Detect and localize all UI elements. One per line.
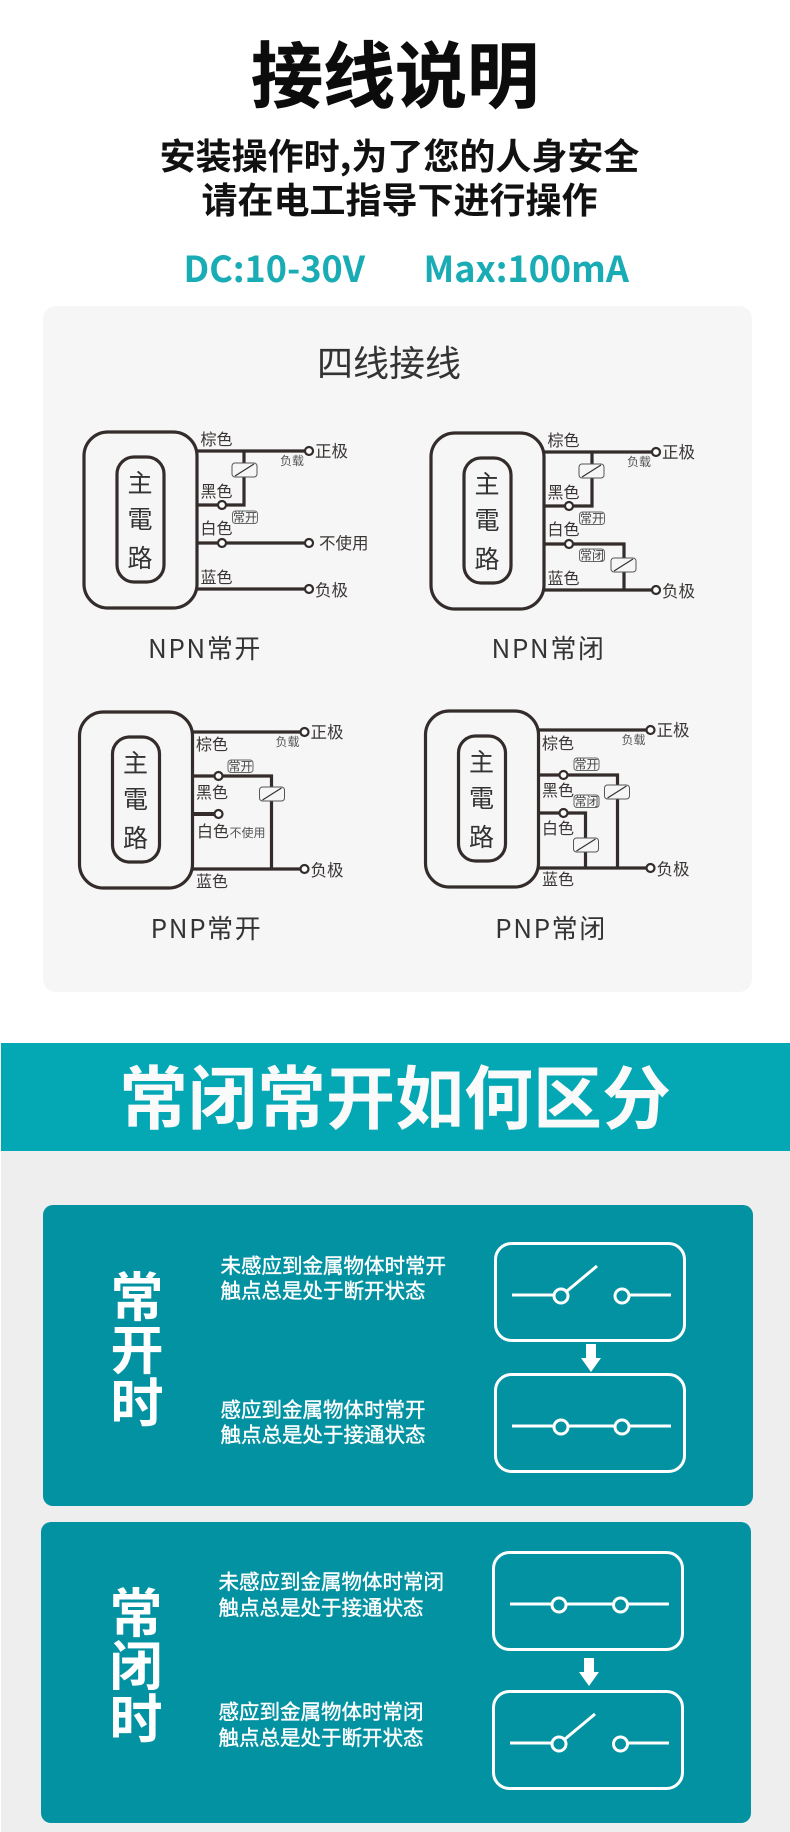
diagram: NPN normally closed: 白色 (548, 516, 580, 540)
vertical heading: 常 (110, 1572, 162, 1648)
diagram: NPN normally closed: 正极 (662, 439, 695, 463)
vertical heading: 时 (110, 1678, 162, 1754)
diagram: PNP normally open (80, 712, 344, 946)
safety notice: 请在电工指导下进行操作 (201, 172, 598, 224)
panel heading: 四线接线 (317, 335, 461, 387)
diagram: NPN normally closed: 主 (474, 465, 500, 501)
banner: how to distinguish NC and NO (1, 1043, 790, 1151)
arrow: down (581, 1344, 601, 1372)
description: sensing metal: 感应到金属物体时常开 (220, 1393, 426, 1423)
description: not sensing metal: 触点总是处于接通状态 (218, 1591, 424, 1621)
vertical heading (110, 1256, 164, 1438)
diagram: PNP normally open: 常开 (228, 758, 253, 775)
diagram: NPN normally closed: 常开 (580, 510, 604, 527)
diagram: PNP normally closed: 黑色 (542, 777, 574, 801)
banner: how to distinguish NC and NO: 常闭常开如何区分 (119, 1043, 671, 1143)
diagram: PNP normally open: 不使用 (230, 824, 266, 841)
diagram: NPN normally closed: 黑色 (548, 479, 580, 503)
diagram: NPN normally closed (431, 427, 695, 666)
diagram: NPN normally closed: 负载 (627, 453, 651, 470)
diagram: PNP normally open: 正极 (310, 719, 344, 743)
panel: four wire wiring (43, 306, 752, 992)
switch: closed (494, 1552, 682, 1650)
description: sensing metal: 触点总是处于断开状态 (218, 1721, 424, 1751)
diagram: PNP normally closed: 電 (469, 779, 494, 815)
diagram: NPN normally closed: 负极 (662, 578, 695, 602)
lower background (1, 1151, 790, 1832)
diagram: NPN normally open: 常开 (233, 509, 257, 526)
electrical specs (184, 241, 630, 293)
diagram: NPN normally closed: 棕色 (548, 427, 580, 451)
diagram: NPN normally open: 電 (127, 500, 153, 536)
diagram: NPN normally closed: NPN常闭 (491, 629, 606, 666)
diagram: PNP normally closed: 白色 (542, 815, 574, 839)
diagram: PNP normally closed: 负载 (622, 731, 646, 748)
diagram: PNP normally closed (426, 711, 690, 946)
diagram: PNP normally closed: 路 (469, 818, 494, 854)
diagram: PNP normally open: 负极 (310, 857, 344, 881)
vertical heading: 开 (110, 1309, 164, 1385)
diagram: NPN normally open: 主 (127, 464, 153, 500)
diagram: NPN normally closed: 電 (474, 501, 500, 537)
description: not sensing metal: 未感应到金属物体时常闭 (218, 1565, 444, 1595)
switch: open (496, 1244, 684, 1340)
vertical heading: 闭 (110, 1625, 162, 1701)
diagram: PNP normally closed: PNP常闭 (495, 909, 607, 946)
description: not sensing metal (218, 1565, 444, 1621)
diagram: PNP normally closed: 蓝色 (542, 866, 574, 890)
diagram: PNP normally closed: 棕色 (542, 730, 574, 754)
description: sensing metal: 触点总是处于接通状态 (220, 1418, 426, 1448)
diagram: NPN normally open: 棕色 (200, 426, 233, 450)
electrical specs: DC:10-30V (184, 241, 366, 293)
description: not sensing metal: 未感应到金属物体时常开 (220, 1249, 446, 1279)
diagram: PNP normally closed: 正极 (656, 717, 690, 741)
diagram: PNP normally open: 棕色 (196, 731, 228, 755)
diagram: PNP normally closed: 负极 (656, 856, 690, 880)
vertical heading: 常 (110, 1256, 164, 1332)
diagram: PNP normally open: 電 (123, 780, 148, 816)
diagram: NPN normally open: 负极 (315, 577, 348, 601)
panel: normally open (43, 1205, 753, 1506)
diagram: PNP normally open: PNP常开 (151, 909, 262, 946)
diagram: NPN normally closed: 路 (474, 540, 500, 576)
vertical heading: 时 (110, 1362, 164, 1438)
electrical specs: Max:100mA (424, 241, 630, 293)
description: not sensing metal: 触点总是处于断开状态 (220, 1274, 426, 1304)
diagram: NPN normally open: 蓝色 (200, 564, 233, 588)
diagram: NPN normally open: 不使用 (319, 530, 368, 554)
description: sensing metal (218, 1695, 424, 1751)
diagram: NPN normally open (84, 426, 368, 666)
description: sensing metal: 感应到金属物体时常闭 (218, 1695, 424, 1725)
switch: closed (496, 1374, 684, 1472)
diagram: NPN normally closed: 常闭 (580, 547, 604, 564)
diagram: NPN normally open: 白色 (200, 515, 233, 539)
diagram: NPN normally closed: 蓝色 (548, 565, 580, 589)
panel: normally closed (41, 1522, 751, 1823)
diagram: NPN normally open: 黑色 (200, 478, 233, 502)
diagram: PNP normally open: 蓝色 (196, 868, 228, 892)
safety notice: 安装操作时,为了您的人身安全 (160, 128, 639, 180)
diagram: PNP normally closed: 常闭 (574, 793, 599, 810)
diagram: PNP normally open: 主 (123, 744, 148, 780)
diagram: PNP normally open: 白色 (197, 818, 229, 842)
description: not sensing metal (220, 1249, 446, 1304)
arrow: down (579, 1658, 599, 1686)
safety notice (160, 128, 639, 224)
vertical heading (110, 1572, 162, 1754)
title: 接线说明 (251, 18, 539, 123)
description: sensing metal (220, 1393, 426, 1448)
diagram: PNP normally closed: 常开 (574, 756, 599, 773)
diagram: PNP normally open: 负载 (276, 733, 300, 750)
switch: open (494, 1692, 682, 1788)
diagram: NPN normally open: 负载 (280, 452, 304, 469)
diagram: PNP normally open: 黑色 (196, 779, 228, 803)
diagram: PNP normally open: 路 (123, 819, 148, 855)
diagram: NPN normally open: 正极 (315, 438, 348, 462)
diagram: PNP normally closed: 主 (469, 743, 494, 779)
diagram: NPN normally open: NPN常开 (148, 629, 262, 666)
diagram: NPN normally open: 路 (127, 539, 153, 575)
